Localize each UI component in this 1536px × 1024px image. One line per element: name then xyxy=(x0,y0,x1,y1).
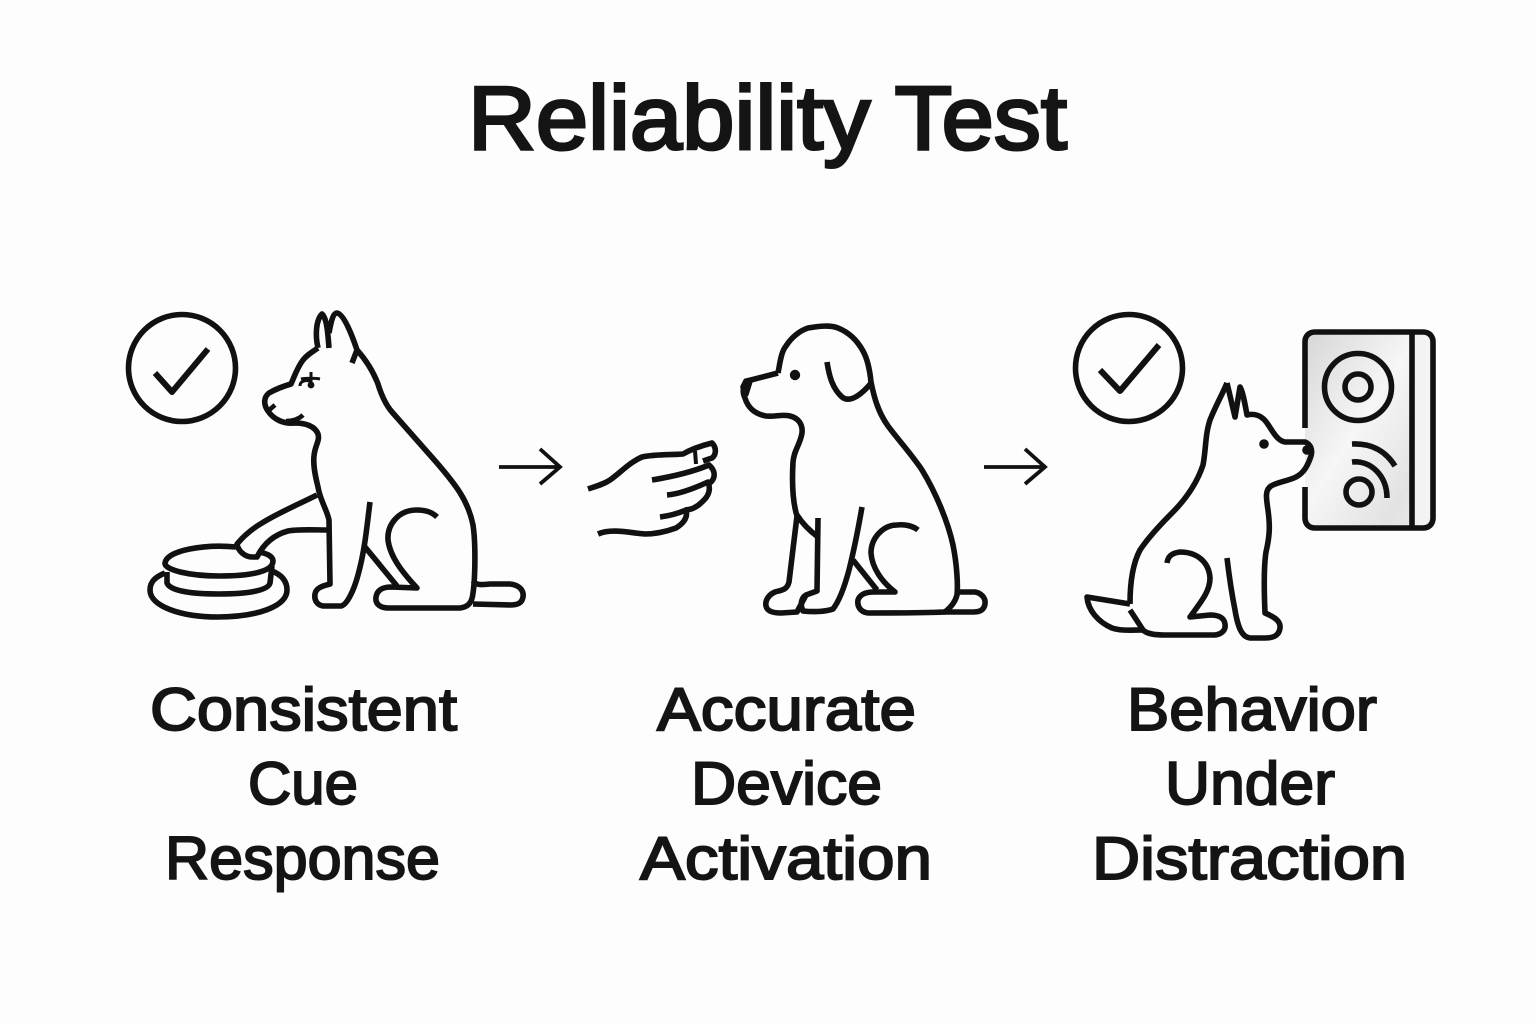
title: Reliability Test xyxy=(468,69,1067,169)
arrow 1 xyxy=(499,449,560,484)
label: behavior under distraction: Distraction xyxy=(1092,825,1407,892)
icon: speaker device xyxy=(1305,332,1433,528)
label: accurate device activation: Activation xyxy=(640,825,932,892)
icon: sitting puppy xyxy=(743,326,985,613)
label: behavior under distraction: Under xyxy=(1165,750,1335,817)
label: accurate device activation xyxy=(640,676,932,892)
icon: check mark in circle xyxy=(128,314,236,422)
step 2: accurate device activation xyxy=(588,326,985,613)
icon: sitting dog pressing button xyxy=(237,313,523,608)
icon: sitting dog sniffing device xyxy=(1087,383,1312,638)
label: behavior under distraction: Behavior xyxy=(1127,676,1377,743)
step 3: behavior under distraction xyxy=(1076,314,1433,638)
icon: floor button xyxy=(150,546,287,617)
label: accurate device activation: Accurate xyxy=(657,676,916,743)
label: consistent cue response: Consistent xyxy=(150,676,457,743)
label: consistent cue response: Response xyxy=(165,825,440,892)
icon: hand xyxy=(588,443,715,534)
icon: check mark in circle xyxy=(1076,314,1182,422)
arrow 2 xyxy=(984,449,1045,484)
label: consistent cue response xyxy=(150,676,457,892)
label: consistent cue response: Cue xyxy=(248,750,358,817)
step 1: consistent cue response xyxy=(128,313,523,617)
label: accurate device activation: Device xyxy=(691,750,882,817)
label: behavior under distraction xyxy=(1092,676,1407,892)
